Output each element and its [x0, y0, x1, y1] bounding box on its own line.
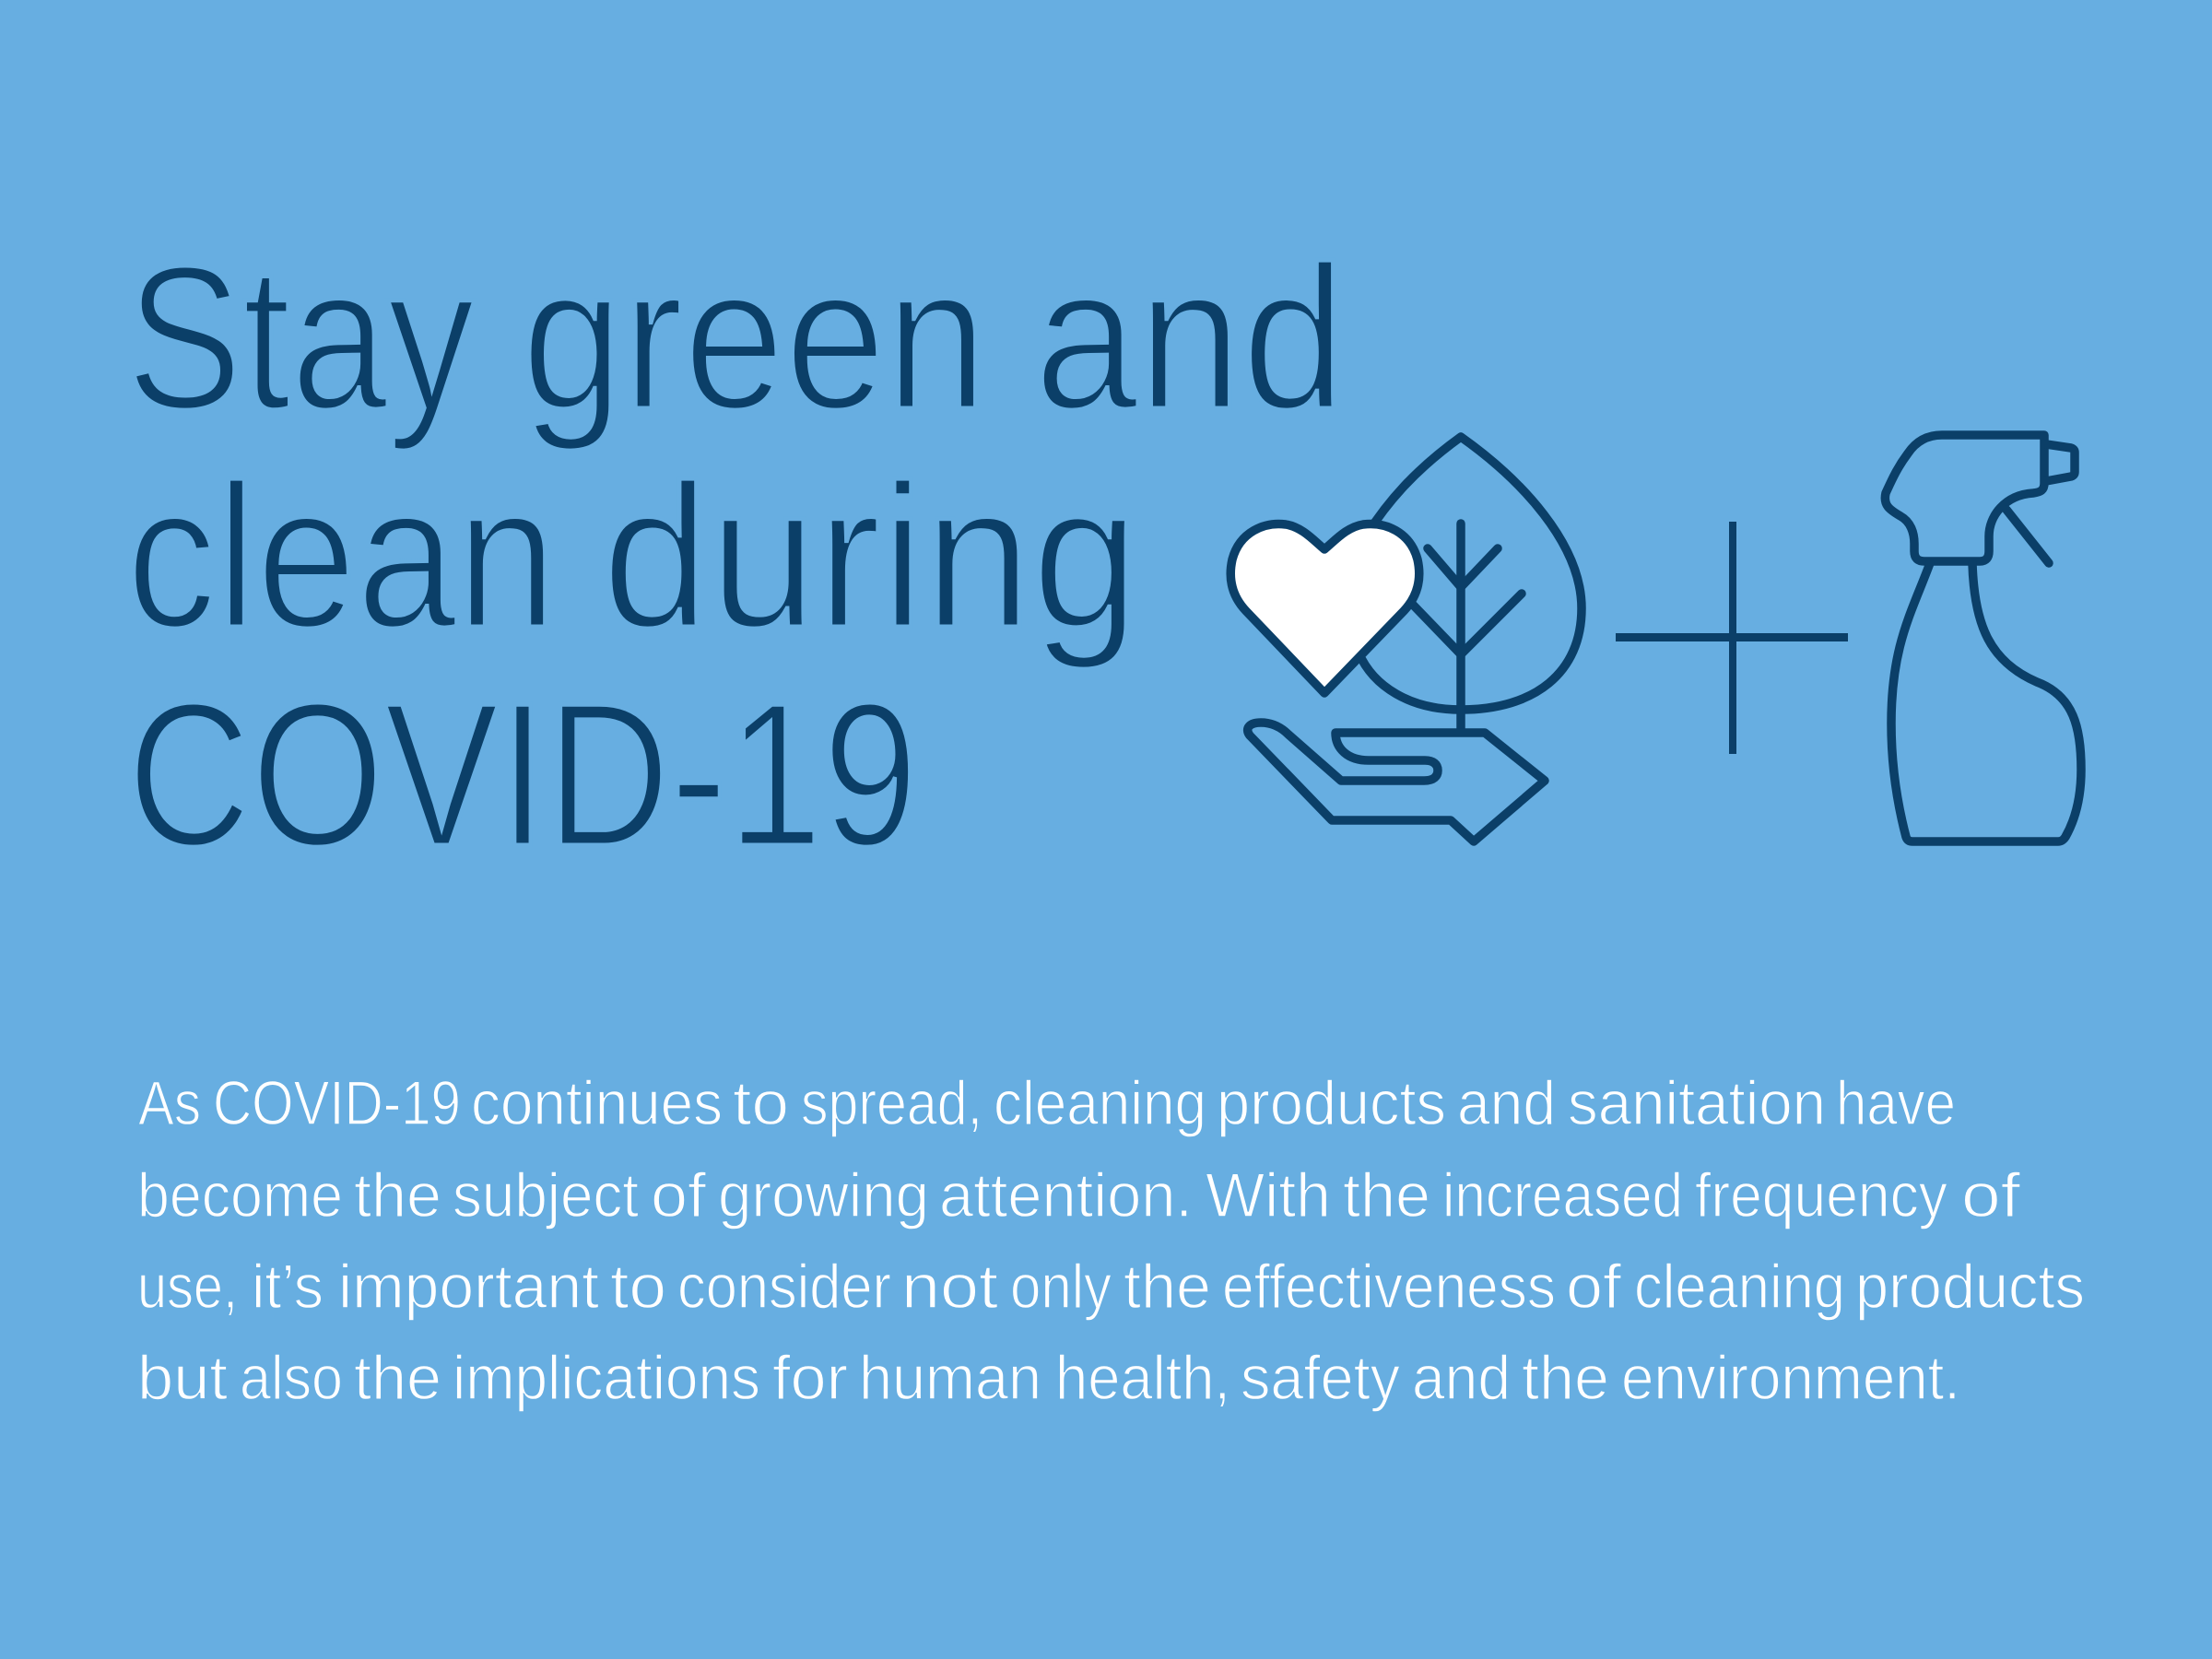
- body paragraph: the: [1522, 1343, 1609, 1413]
- icon: plus sign: [1616, 522, 1848, 754]
- body paragraph: also: [240, 1343, 343, 1413]
- body paragraph: consider: [677, 1252, 891, 1322]
- title: green: [522, 224, 987, 453]
- icon: spray bottle: [1885, 435, 2081, 841]
- body paragraph: to: [733, 1068, 789, 1138]
- body paragraph: safety: [1241, 1343, 1400, 1413]
- nozzle: [2046, 444, 2075, 481]
- body paragraph: cleaning: [1634, 1252, 1845, 1322]
- bottle head: [1885, 435, 2044, 561]
- body paragraph: human: [859, 1343, 1041, 1413]
- body paragraph: it’s: [252, 1252, 324, 1322]
- icon: leaf with stem: [1359, 437, 1582, 730]
- title: Stay: [126, 224, 475, 453]
- body paragraph: increased: [1442, 1160, 1683, 1230]
- body paragraph: With: [1206, 1160, 1331, 1230]
- body paragraph: implications: [453, 1343, 760, 1413]
- body paragraph: for: [772, 1343, 848, 1413]
- body paragraph: the: [1124, 1252, 1211, 1322]
- icon: heart: [1230, 524, 1419, 693]
- body paragraph: of: [1961, 1160, 2020, 1230]
- body paragraph: health,: [1055, 1343, 1230, 1413]
- body paragraph: of: [651, 1160, 706, 1230]
- body paragraph: sanitation: [1568, 1068, 1826, 1138]
- body paragraph: important: [338, 1252, 599, 1322]
- body paragraph: become: [137, 1160, 343, 1230]
- title: [126, 224, 1346, 889]
- body paragraph: use,: [137, 1252, 238, 1322]
- trigger: [2006, 510, 2049, 563]
- body paragraph: and: [1412, 1343, 1511, 1413]
- body paragraph: the: [354, 1343, 441, 1413]
- body paragraph: the: [354, 1160, 441, 1230]
- body paragraph: spread,: [801, 1068, 982, 1138]
- body paragraph: but: [137, 1343, 228, 1413]
- body paragraph: effectiveness: [1222, 1252, 1556, 1322]
- body paragraph: subject: [453, 1160, 639, 1230]
- body paragraph: environment.: [1621, 1343, 1960, 1413]
- body paragraph: and: [1457, 1068, 1556, 1138]
- body paragraph: only: [1010, 1252, 1112, 1322]
- body paragraph: COVID-19: [213, 1068, 461, 1138]
- icon: open hand: [1248, 723, 1545, 841]
- bottle body: [1891, 563, 2081, 841]
- title: and: [1034, 224, 1346, 453]
- body paragraph: of: [1566, 1252, 1621, 1322]
- body paragraph: products: [1855, 1252, 2085, 1322]
- body paragraph: cleaning: [994, 1068, 1206, 1138]
- body paragraph: As: [138, 1068, 201, 1138]
- body paragraph: not: [901, 1252, 998, 1322]
- body paragraph: attention.: [939, 1160, 1193, 1230]
- body paragraph: [137, 1068, 2085, 1413]
- title: clean: [126, 442, 557, 671]
- body paragraph: have: [1836, 1068, 1956, 1138]
- body paragraph: the: [1343, 1160, 1430, 1230]
- title: COVID-19: [127, 661, 918, 889]
- body paragraph: to: [610, 1252, 666, 1322]
- body paragraph: products: [1217, 1068, 1446, 1138]
- body paragraph: growing: [718, 1160, 929, 1230]
- title: during: [602, 442, 1139, 671]
- body paragraph: continues: [471, 1068, 723, 1138]
- body paragraph: frequency: [1695, 1160, 1947, 1230]
